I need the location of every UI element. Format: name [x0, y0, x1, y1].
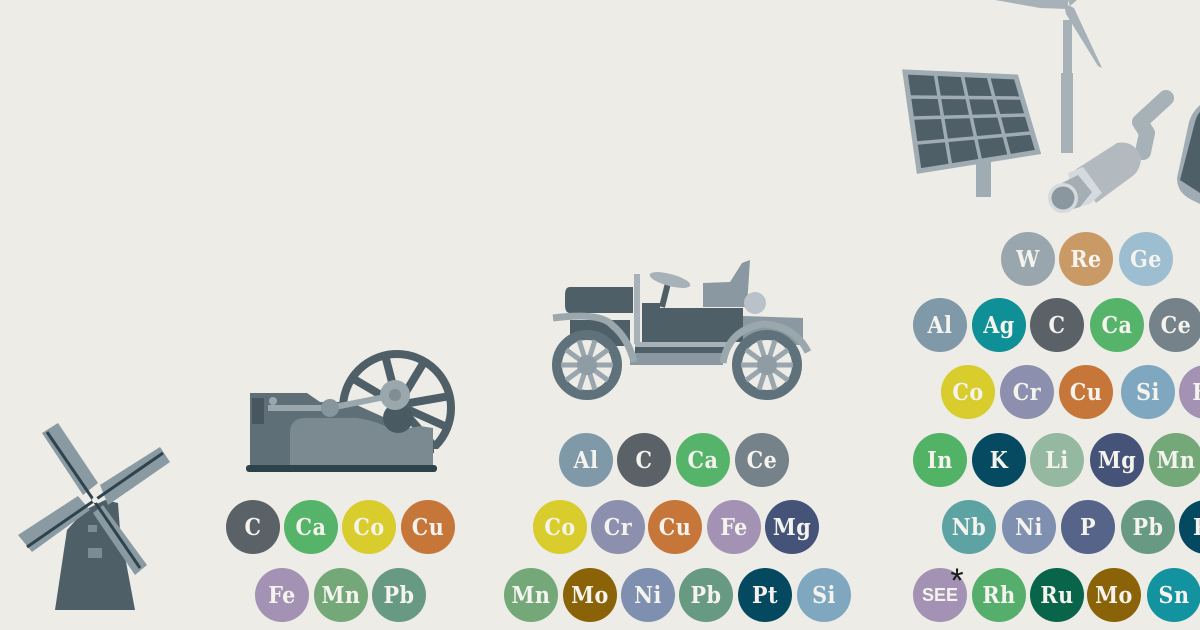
element: Si: [1121, 365, 1175, 419]
element: Mn: Mn: [322, 582, 360, 609]
front-left wheel: [557, 335, 617, 395]
icon: exhaust muffler: [1048, 98, 1166, 213]
element: W: W: [1015, 246, 1040, 273]
element: Co: [342, 500, 396, 554]
element: Re: [1059, 232, 1113, 286]
element: Mg: Mg: [773, 514, 811, 541]
element: Pb: [372, 568, 426, 622]
element: Co: Co: [952, 379, 984, 406]
element: Cu: Cu: [1070, 379, 1102, 406]
element: Mn: Mn: [1157, 447, 1195, 474]
icon: wind turbine: [995, 0, 1102, 153]
element: Ca: Ca: [1102, 312, 1132, 339]
element: C: C: [636, 447, 652, 474]
element: Ca: Ca: [688, 447, 718, 474]
element: Cr: [591, 500, 645, 554]
element: Ge: Ge: [1130, 246, 1162, 273]
element: Nb: Nb: [952, 514, 986, 541]
element: Si: [797, 568, 851, 622]
element: K: K: [990, 447, 1009, 474]
element: Ca: [676, 433, 730, 487]
element: Cr: [1000, 365, 1054, 419]
group: steam engine elements: [226, 500, 455, 622]
element: Mg: [765, 500, 819, 554]
element: Ca: Ca: [296, 514, 326, 541]
element: Ni: [1002, 500, 1056, 554]
element: Li: Li: [1045, 447, 1069, 474]
element: Al: Al: [927, 312, 952, 339]
element: C: [1030, 298, 1084, 352]
element: Pb: [1121, 500, 1175, 554]
element: SEE with asterisk: SEE: [922, 585, 958, 605]
element: Al: [913, 298, 967, 352]
element: Ru: Ru: [1040, 582, 1074, 609]
element: Mg: Mg: [1098, 447, 1136, 474]
element: P: P: [1080, 514, 1096, 541]
element: Pb: [679, 568, 733, 622]
element: Mn: [504, 568, 558, 622]
element: Mg: [1090, 433, 1144, 487]
icon: smartphone: [1177, 105, 1200, 204]
element: Nb: [942, 500, 996, 554]
element: Ce: Ce: [747, 447, 777, 474]
element: Cu: Cu: [659, 514, 691, 541]
element: Mo: [1087, 568, 1141, 622]
element: Sn: [1147, 568, 1200, 622]
element: Fe: [707, 500, 761, 554]
element: Pb: Pb: [383, 582, 415, 609]
element: Al: [559, 433, 613, 487]
element: Ag: [972, 298, 1026, 352]
element: P: [1061, 500, 1115, 554]
element: Co: [533, 500, 587, 554]
element: C: [226, 500, 280, 554]
element: Ni: [621, 568, 675, 622]
element: Li: [1030, 433, 1084, 487]
element: Pb: Pb: [1132, 514, 1164, 541]
element: Mn: [314, 568, 368, 622]
element: Cr: Cr: [1013, 379, 1042, 406]
element: Si: Si: [1136, 379, 1160, 406]
element: Ni: Ni: [1015, 514, 1043, 541]
element: Co: Co: [353, 514, 385, 541]
element: Mn: Mn: [512, 582, 550, 609]
element: Cu: [648, 500, 702, 554]
element: Si: Si: [812, 582, 836, 609]
element: Ru: [1030, 568, 1084, 622]
element: In: In: [927, 447, 953, 474]
element: Cr: Cr: [604, 514, 633, 541]
group: modern technology elements: [913, 232, 1200, 622]
element: Cu: [1059, 365, 1113, 419]
element: Re: Re: [1070, 246, 1102, 273]
icon: vintage car: [553, 260, 808, 395]
element: Co: [941, 365, 995, 419]
icon: solar panel: [905, 72, 1038, 197]
element: Rh: [972, 568, 1026, 622]
element: C: [617, 433, 671, 487]
group: car elements: [504, 433, 851, 622]
element: Ce: Ce: [1161, 312, 1191, 339]
element: Mo: Mo: [571, 582, 609, 609]
element: Ca: [284, 500, 338, 554]
element: Mo: Mo: [1095, 582, 1133, 609]
element: SEE with asterisk: *: [950, 562, 964, 600]
element: Fe: [1179, 365, 1200, 419]
element: Pt: Pt: [752, 582, 778, 609]
element: Ce: [735, 433, 789, 487]
element: K: [972, 433, 1026, 487]
element: Pb: Pb: [690, 582, 722, 609]
element: Fe: Fe: [268, 582, 296, 609]
element: Mo: [563, 568, 617, 622]
element: Co: Co: [544, 514, 576, 541]
element: Rh: Rh: [982, 582, 1016, 609]
element: Ni: Ni: [634, 582, 662, 609]
icon: windmill: [18, 423, 170, 610]
element: Cu: Cu: [412, 514, 444, 541]
element: Al: Al: [573, 447, 598, 474]
element: Pt: [738, 568, 792, 622]
icon: steam engine: [246, 354, 458, 472]
element: Ge: [1119, 232, 1173, 286]
element: Cu: [401, 500, 455, 554]
element: W: [1001, 232, 1055, 286]
element: Ag: Ag: [982, 312, 1015, 339]
element: Fe: Fe: [720, 514, 748, 541]
element: Pt: [1179, 500, 1200, 554]
element: Ce: [1149, 298, 1200, 352]
element: In: [913, 433, 967, 487]
element: Sn: Sn: [1158, 582, 1190, 609]
element: Ca: [1090, 298, 1144, 352]
element: Mn: [1149, 433, 1200, 487]
rear wheel: [737, 335, 797, 395]
element: SEE with asterisk: [913, 562, 967, 622]
element: Fe: [255, 568, 309, 622]
element: C: C: [1049, 312, 1065, 339]
element: C: C: [245, 514, 261, 541]
